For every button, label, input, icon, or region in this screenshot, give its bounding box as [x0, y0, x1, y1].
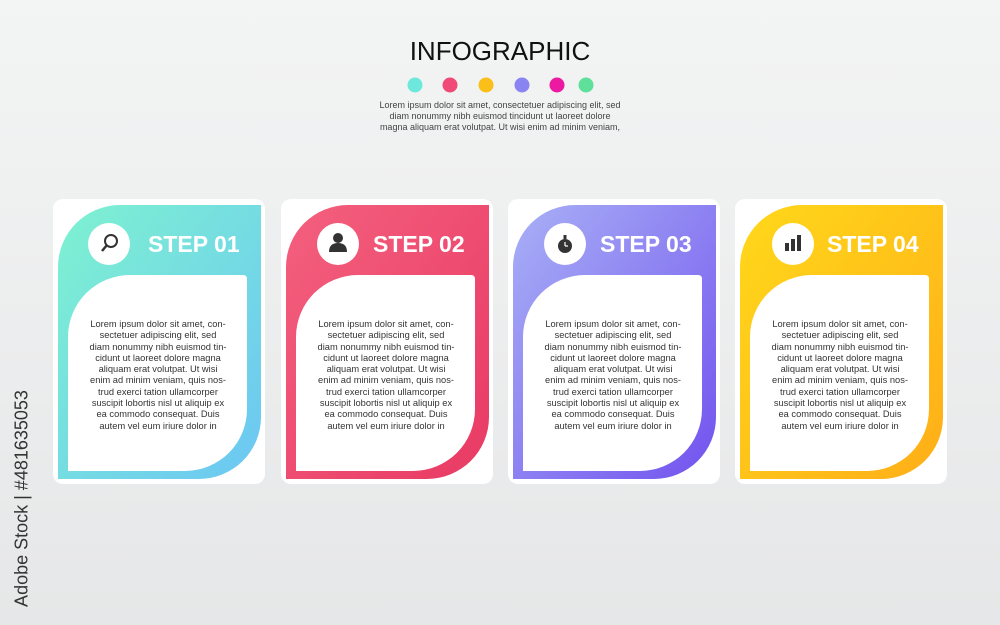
card text 1: Lorem ipsum dolor sit amet, con- [90, 319, 226, 329]
card text 3: aliquam erat volutpat. Ut wisi [554, 364, 672, 374]
card text 1: aliquam erat volutpat. Ut wisi [99, 364, 217, 374]
card text 1: cidunt ut laoreet dolore magna [95, 353, 221, 363]
card text 3 [544, 319, 682, 431]
card text 3: cidunt ut laoreet dolore magna [550, 353, 676, 363]
card text 2: autem vel eum iriure dolor in [327, 421, 445, 431]
card: step 02 [281, 199, 493, 484]
card: step 01: STEP 01 [148, 231, 240, 257]
subtitle text: Lorem ipsum dolor sit amet, consectetuer adipiscing elit, sed [379, 100, 621, 110]
card text 1: trud exerci tation ullamcorper [98, 387, 218, 397]
card text 2: suscipit lobortis nisl ut aliquip ex [320, 398, 452, 408]
card text 4: sectetuer adipiscing elit, sed [782, 330, 898, 340]
card text 4: Lorem ipsum dolor sit amet, con- [772, 319, 908, 329]
card text 1 [90, 319, 226, 431]
card text 2: aliquam erat volutpat. Ut wisi [327, 364, 445, 374]
card text 2: trud exerci tation ullamcorper [326, 387, 446, 397]
title: INFOGRAPHIC [410, 36, 590, 66]
card: step 04: STEP 04 [827, 231, 919, 257]
subtitle text [379, 100, 621, 132]
card text 3: trud exerci tation ullamcorper [553, 387, 673, 397]
card text 4: aliquam erat volutpat. Ut wisi [781, 364, 899, 374]
card text 1: autem vel eum iriure dolor in [99, 421, 217, 431]
card text 3: Lorem ipsum dolor sit amet, con- [545, 319, 681, 329]
card: step 02: STEP 02 [373, 231, 465, 257]
card text 2 [318, 319, 454, 431]
card text 3: enim ad minim veniam, quis nos- [545, 375, 681, 385]
card text 3: ea commodo consequat. Duis [552, 409, 674, 419]
side watermark text: Adobe Stock | #481635053 [12, 390, 32, 607]
card: step 03 [508, 199, 720, 484]
subtitle text: diam nonummy nibh euismod tincidunt ut laoreet dolore [389, 111, 611, 121]
card text 4: cidunt ut laoreet dolore magna [777, 353, 903, 363]
card text 4 [772, 319, 908, 431]
subtitle text: magna aliquam erat volutpat. Ut wisi enim ad minim veniam, [380, 122, 620, 132]
card text 3: autem vel eum iriure dolor in [554, 421, 672, 431]
card text 4: autem vel eum iriure dolor in [781, 421, 899, 431]
card text 1: sectetuer adipiscing elit, sed [100, 330, 216, 340]
card text 1: suscipit lobortis nisl ut aliquip ex [92, 398, 224, 408]
card text 2: diam nonummy nibh euismod tin- [318, 342, 454, 352]
card text 3: diam nonummy nibh euismod tin- [545, 342, 681, 352]
card text 2: ea commodo consequat. Duis [324, 409, 448, 419]
card text 4: diam nonummy nibh euismod tin- [772, 342, 908, 352]
card text 3: sectetuer adipiscing elit, sed [555, 330, 671, 340]
card text 3: suscipit lobortis nisl ut aliquip ex [547, 398, 679, 408]
card: step 01 [53, 199, 265, 484]
card text 2: enim ad minim veniam, quis nos- [318, 375, 454, 385]
card text 2: sectetuer adipiscing elit, sed [328, 330, 444, 340]
card text 2: Lorem ipsum dolor sit amet, con- [318, 319, 454, 329]
card text 4: ea commodo consequat. Duis [778, 409, 902, 419]
card text 1: ea commodo consequat. Duis [96, 409, 220, 419]
card text 4: suscipit lobortis nisl ut aliquip ex [774, 398, 906, 408]
card text 2: cidunt ut laoreet dolore magna [323, 353, 449, 363]
card text 1: diam nonummy nibh euismod tin- [90, 342, 226, 352]
card: step 04 [735, 199, 947, 484]
card text 4: trud exerci tation ullamcorper [780, 387, 900, 397]
color dots [408, 78, 594, 92]
card text 4: enim ad minim veniam, quis nos- [772, 375, 908, 385]
card: step 03: STEP 03 [600, 231, 692, 257]
card text 1: enim ad minim veniam, quis nos- [90, 375, 226, 385]
